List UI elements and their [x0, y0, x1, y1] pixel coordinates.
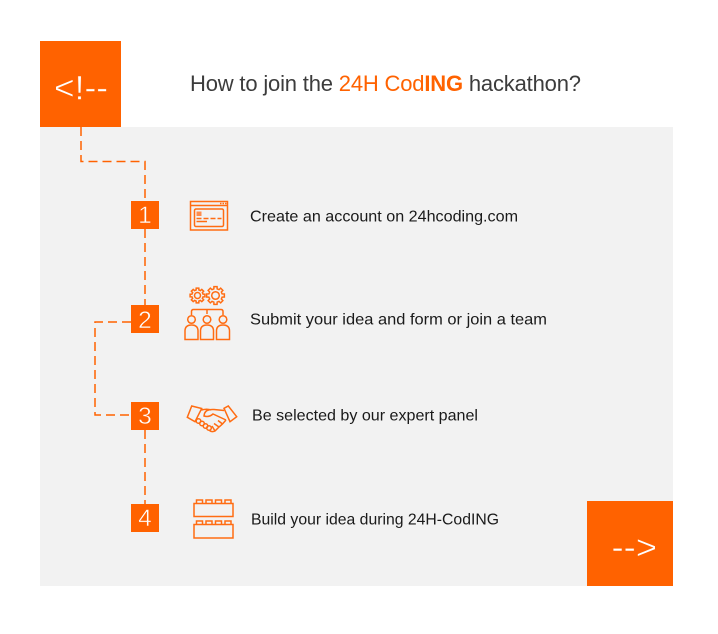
opening tag box: <!--	[54, 70, 108, 108]
step 1 text: Create an account on 24hcoding.com	[250, 208, 518, 226]
icon: browser window with card	[190, 202, 228, 230]
closing tag box: -->	[612, 529, 657, 567]
step 2	[131, 287, 547, 340]
step 2 text: Submit your idea and form or join a team	[250, 312, 547, 328]
panel: grey background	[40, 127, 673, 586]
icon: handshake	[187, 406, 237, 432]
step 2 number: 2	[138, 307, 152, 334]
step 1 number	[131, 201, 159, 229]
closing tag box	[587, 501, 673, 586]
step 4 number	[131, 504, 159, 532]
icon: team with gears	[185, 287, 230, 340]
opening tag box	[40, 41, 121, 127]
step 1	[131, 201, 518, 230]
step 3 number	[131, 402, 159, 430]
icon: building bricks	[194, 500, 233, 538]
step 4 number: 4	[138, 505, 152, 532]
step 3 number: 3	[138, 403, 152, 430]
step 1 number: 1	[138, 202, 152, 229]
step 4 text: Build your idea during 24H-CodING	[251, 512, 499, 528]
dashed connector path	[81, 127, 145, 504]
title: How to join the 24H CodING hackathon?	[190, 71, 581, 96]
step 3	[131, 402, 478, 432]
step 4	[131, 500, 499, 538]
step 2 number	[131, 305, 159, 334]
step 3 text: Be selected by our expert panel	[252, 408, 478, 424]
